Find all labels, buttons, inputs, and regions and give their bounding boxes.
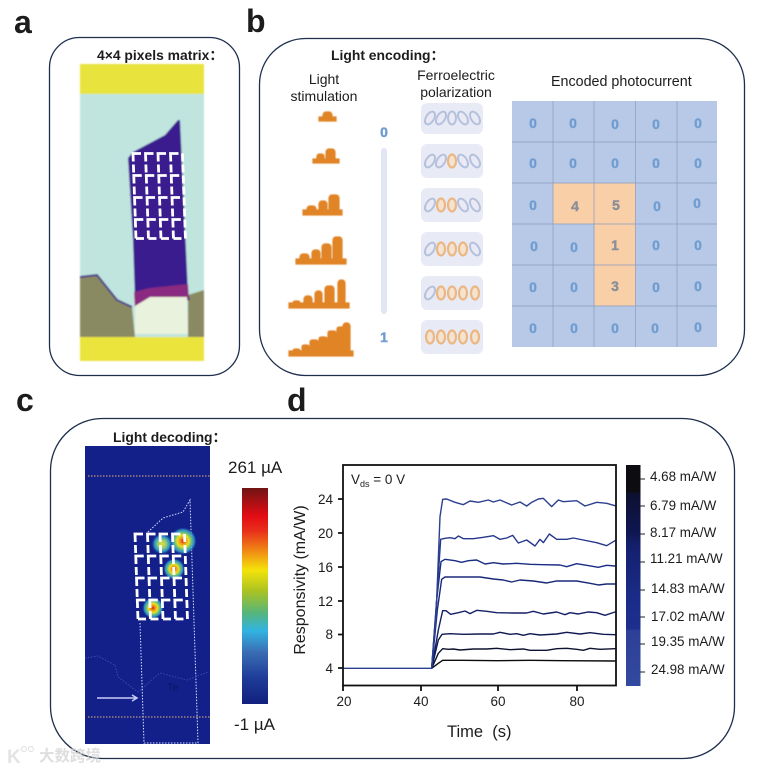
panel a: pixel matrix xyxy=(50,38,240,376)
x tick labels: 80 xyxy=(569,694,585,709)
encoded photocurrent matrix: 0 xyxy=(570,239,578,255)
scale bar from 0 to 1: 1 xyxy=(380,329,388,345)
encoded photocurrent matrix: 0 xyxy=(611,155,619,171)
encoded photocurrent matrix: 0 xyxy=(652,237,660,253)
color scale: 261 µA xyxy=(228,458,283,477)
encoded photocurrent matrix: 0 xyxy=(653,198,661,214)
legend: responsivity levels: 11.21 mA/W xyxy=(650,551,723,566)
light pulse trains xyxy=(289,112,353,356)
encoded photocurrent matrix: 0 xyxy=(611,320,619,336)
column title: encoded photocurrent: Encoded photocurrent xyxy=(551,74,692,90)
legend: responsivity levels: 19.35 mA/W xyxy=(651,634,725,649)
legend: responsivity levels: 4.68 mA/W xyxy=(650,469,717,484)
panel c and d container xyxy=(50,418,734,758)
encoded photocurrent matrix: 5 xyxy=(612,197,620,213)
legend: responsivity levels: 24.98 mA/W xyxy=(651,662,725,677)
label d: d xyxy=(287,382,307,418)
line chart: responsivity vs time xyxy=(292,465,616,741)
encoded photocurrent matrix: 0 xyxy=(694,115,702,131)
scale bar from 0 to 1 xyxy=(380,124,388,345)
y axis title: Responsivity (mA/W) xyxy=(292,505,309,655)
encoded photocurrent matrix: 0 xyxy=(569,115,577,131)
encoded photocurrent matrix: 0 xyxy=(570,279,578,295)
color scale: -1 µA xyxy=(234,715,276,734)
legend: responsivity levels: 6.79 mA/W xyxy=(650,498,717,513)
x tick labels xyxy=(336,694,585,709)
encoded photocurrent matrix: 3 xyxy=(611,278,619,294)
x tick labels: 60 xyxy=(490,694,506,709)
encoded photocurrent matrix: 0 xyxy=(651,320,659,336)
encoded photocurrent matrix: 0 xyxy=(694,155,702,171)
panel b: light encoding xyxy=(260,38,744,376)
curves xyxy=(343,498,615,668)
column title: light stimulation: Light xyxy=(309,71,339,87)
micrograph of device xyxy=(80,64,204,361)
encoded photocurrent matrix: 0 xyxy=(530,238,538,254)
encoded photocurrent matrix: 0 xyxy=(529,320,537,336)
polarization states xyxy=(421,103,483,354)
y tick labels xyxy=(318,492,333,676)
y tick labels: 4 xyxy=(325,661,333,676)
encoded photocurrent matrix: 0 xyxy=(693,195,701,211)
legend: responsivity levels: 14.83 mA/W xyxy=(651,581,725,596)
x tick labels: 20 xyxy=(336,694,352,709)
y tick labels: 20 xyxy=(318,526,333,541)
annotation: Vds: V xyxy=(351,472,360,487)
current hot spots xyxy=(142,527,197,619)
arrow xyxy=(97,695,137,701)
heading: 4x4 pixels matrix: 4×4 pixels matrix： xyxy=(97,47,223,63)
column title: ferroelectric polarization: polarization xyxy=(420,84,492,100)
x axis title: Time (s) xyxy=(447,723,511,741)
annotation: Vds: ds xyxy=(360,479,370,489)
encoded photocurrent matrix: 1 xyxy=(611,237,619,253)
encoded photocurrent matrix: 0 xyxy=(652,116,660,132)
encoded photocurrent matrix: 0 xyxy=(570,320,578,336)
label b: b xyxy=(246,3,266,39)
encoded photocurrent matrix: 0 xyxy=(694,278,702,294)
watermark: 大数跨境 xyxy=(39,746,101,765)
annotation: Vds: = 0 V xyxy=(370,472,405,487)
legend: responsivity levels xyxy=(626,465,725,686)
photocurrent map xyxy=(85,446,210,744)
color scale xyxy=(228,458,283,734)
encoded photocurrent matrix: 4 xyxy=(571,198,579,214)
column title: ferroelectric polarization: Ferroelectric xyxy=(417,67,495,83)
encoded photocurrent matrix: 0 xyxy=(611,116,619,132)
y tick labels: 24 xyxy=(318,492,333,507)
heading: light encoding: Light encoding： xyxy=(331,47,444,63)
heading: light decoding: Light decoding： xyxy=(113,429,226,445)
encoded photocurrent matrix: 0 xyxy=(529,279,537,295)
label c: c xyxy=(16,382,34,418)
encoded photocurrent matrix: 0 xyxy=(529,197,537,213)
x tick labels: 40 xyxy=(413,694,429,709)
y tick labels: 16 xyxy=(318,560,333,575)
label a: a xyxy=(14,4,32,40)
encoded photocurrent matrix: 0 xyxy=(529,155,537,171)
Te label: Te xyxy=(167,682,179,694)
watermark: K xyxy=(7,747,21,768)
plot frame and ticks xyxy=(338,465,616,691)
y tick labels: 12 xyxy=(318,594,333,609)
encoded photocurrent matrix: 0 xyxy=(694,319,702,335)
legend: responsivity levels: 17.02 mA/W xyxy=(651,609,725,624)
encoded photocurrent matrix: 0 xyxy=(652,155,660,171)
encoded photocurrent matrix xyxy=(512,101,717,347)
y tick labels: 8 xyxy=(325,627,333,642)
scale bar from 0 to 1: 0 xyxy=(380,124,388,140)
encoded photocurrent matrix: 0 xyxy=(529,115,537,131)
legend: responsivity levels: 8.17 mA/W xyxy=(650,525,717,540)
encoded photocurrent matrix: 0 xyxy=(652,279,660,295)
encoded photocurrent matrix: 0 xyxy=(694,237,702,253)
encoded photocurrent matrix: 0 xyxy=(569,155,577,171)
watermark xyxy=(7,746,101,768)
column title: light stimulation: stimulation xyxy=(291,88,357,104)
